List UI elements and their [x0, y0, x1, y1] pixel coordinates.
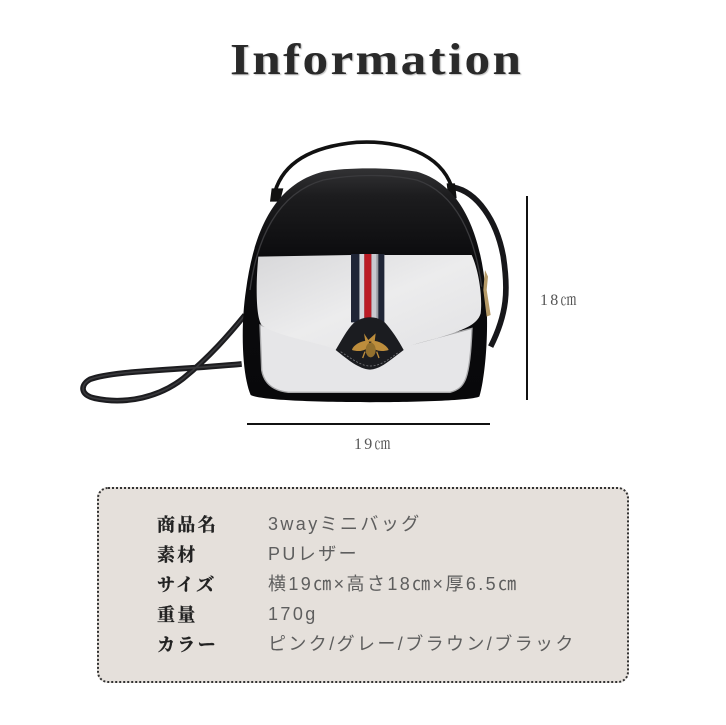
label: color: カラー: [157, 631, 218, 657]
bag body: [243, 168, 487, 402]
ribbon stripes: [351, 254, 384, 322]
value: size: 横19㎝×高さ18㎝×厚6.5㎝: [268, 574, 518, 594]
front flap: [257, 255, 481, 351]
value: material: PUレザー: [268, 544, 359, 564]
label: material: 素材: [157, 541, 198, 567]
handle posts: [270, 183, 457, 202]
panel: specifications: [97, 487, 629, 683]
title: Information: [230, 35, 523, 84]
label: weight: 重量: [157, 601, 198, 627]
label: product name: 商品名: [157, 511, 218, 537]
shoulder strap right: [453, 187, 506, 347]
label: size: サイズ: [157, 571, 216, 597]
value: color: ピンク/グレー/ブラウン/ブラック: [268, 634, 576, 654]
dimension line: width: [247, 423, 490, 425]
value: weight: 170g: [268, 604, 318, 624]
zipper seam: [250, 175, 482, 290]
zipper pull: [483, 270, 491, 317]
top handle: [275, 142, 452, 192]
value: product name: 3wayミニバッグ: [268, 514, 422, 534]
bee emblem: [352, 333, 389, 358]
lower pocket: [260, 325, 472, 392]
shoulder strap left loop: [83, 315, 245, 401]
label: height: 18㎝: [540, 292, 579, 309]
dimension line: height: [526, 196, 528, 400]
tab stitching: [341, 352, 399, 366]
bee clasp tab: [336, 317, 404, 370]
label: width: 19㎝: [354, 436, 393, 453]
